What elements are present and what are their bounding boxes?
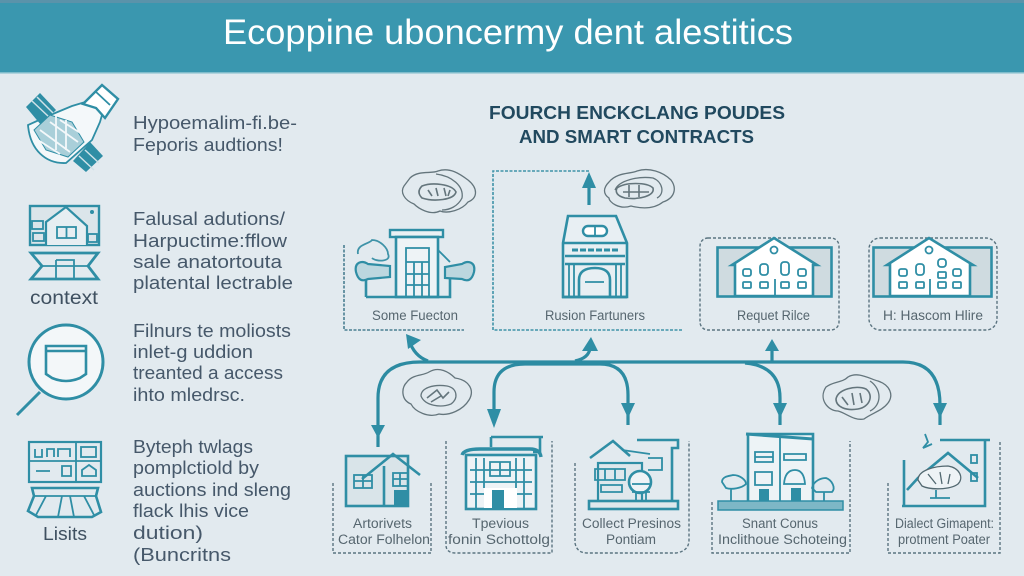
header banner	[0, 0, 1024, 74]
text: block 4: Byteph twlags	[133, 436, 253, 457]
icon: tower building	[356, 230, 474, 297]
text: block 4: flack lhis vice	[133, 500, 249, 521]
text: block 3: treanted a access	[133, 362, 283, 383]
diagram heading: AND SMART CONTRACTS	[519, 127, 754, 147]
text: block 2: Falusal adutions/	[133, 208, 286, 229]
arrow: up-left return	[409, 340, 428, 361]
icon: handshake bottle	[26, 85, 118, 172]
label: Requet Rilce	[737, 308, 810, 323]
label: Dialect Gimapent:	[895, 516, 994, 531]
label: H: Hascom Hlire	[883, 308, 983, 323]
label: Collect Presinos	[582, 516, 681, 531]
text: block 2: sale anatortouta	[133, 251, 283, 272]
icon: house plan	[30, 206, 99, 279]
text: block 1	[133, 112, 297, 155]
text: block 4: auctions ind sleng	[133, 479, 291, 500]
label: context: context	[30, 288, 99, 309]
text: block 2	[133, 208, 293, 293]
label: lists: Lisits	[43, 524, 87, 544]
panel: snant conus	[712, 434, 850, 553]
icon: school building	[462, 437, 543, 509]
cloud: top centre	[604, 170, 674, 208]
text: block 3: ihto mledrsc.	[133, 384, 245, 405]
panel: request rilce	[700, 238, 839, 330]
icon: office with trees	[718, 434, 843, 510]
panel: hascom hlire	[869, 238, 997, 330]
label	[718, 516, 847, 547]
label: Snant Conus	[742, 516, 818, 531]
panel: artorivets	[333, 454, 431, 553]
label: Pontiam	[606, 532, 656, 547]
arrow: up	[582, 172, 596, 205]
arrow: up-centre return	[575, 348, 590, 361]
icon: school house	[718, 238, 832, 296]
text: block 4	[133, 436, 291, 565]
text: block 4: (Buncritns	[133, 544, 231, 565]
icon: keyboard dashboard	[28, 442, 101, 517]
icon: bank building	[562, 216, 627, 297]
cloud: top left	[402, 170, 476, 213]
label: Tpevious	[472, 516, 529, 531]
label	[338, 516, 430, 547]
panel: rusion partners	[493, 171, 682, 330]
title: Ecoppine uboncermy dent alestitics	[223, 13, 793, 52]
panel: dialect component	[888, 434, 1000, 553]
icon: house with cloud	[902, 434, 990, 506]
panel: some function	[344, 230, 474, 330]
text: block 3: Filnurs te moliosts	[133, 320, 291, 341]
text: block 1: Feporis audtions!	[133, 134, 283, 155]
text: block 2: Harpuctime:fflow	[133, 230, 288, 251]
text: block 4: dution)	[133, 522, 203, 543]
panel: collect presinos	[575, 440, 689, 553]
label: Inclithoue Schoteing	[718, 532, 847, 547]
flow connectors	[371, 334, 947, 447]
label: Artorivets	[353, 516, 412, 531]
label	[895, 516, 994, 547]
arrow: fourth column branch	[745, 363, 780, 425]
text: block 3	[133, 320, 291, 405]
label	[582, 516, 681, 547]
label: protment Poater	[898, 532, 990, 547]
arrowheads	[371, 334, 947, 438]
diagram heading	[489, 103, 785, 147]
icon: house	[346, 454, 420, 506]
text: block 2: platental lectrable	[133, 272, 293, 293]
cloud: lower right	[823, 375, 891, 419]
arrow: up-right return	[770, 350, 774, 362]
cloud: lower left	[403, 370, 471, 415]
icon: magnifier with pocket	[17, 325, 103, 415]
label: fonin Schottolg	[448, 532, 550, 547]
label	[448, 516, 550, 547]
label: Rusion Fartuners	[545, 308, 645, 323]
panel: tpevious	[446, 437, 552, 553]
text: block 4: pomplctiold by	[133, 457, 260, 478]
arrow: main line	[378, 362, 940, 447]
label: Some Fuecton	[372, 308, 458, 323]
label: Cator Folhelon	[338, 532, 430, 547]
text: block 3: inlet-g uddion	[133, 341, 253, 362]
left column	[17, 85, 297, 565]
icon: houses with chair	[589, 440, 678, 509]
diagram heading: FOURCH ENCKCLANG POUDES	[489, 103, 785, 123]
text: block 1: Hypoemalim-fi.be-	[133, 112, 297, 133]
arrow: inner branch	[494, 364, 628, 425]
icon: school house	[874, 238, 992, 296]
